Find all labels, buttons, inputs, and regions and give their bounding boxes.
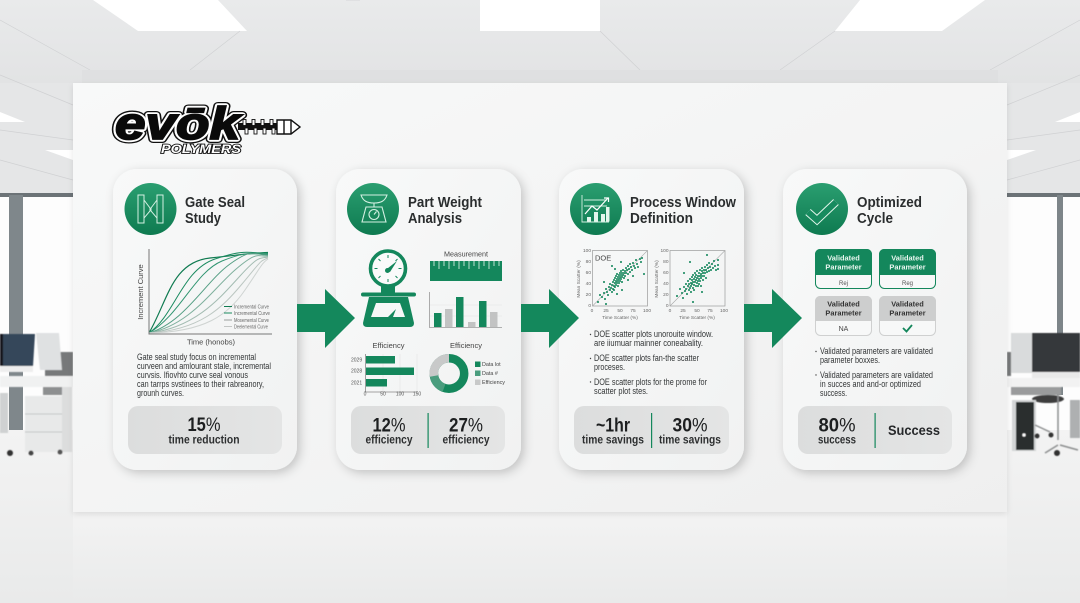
line chart: incremental curves: Incremental Curve — [234, 311, 270, 317]
parameter box: NA: NA — [839, 326, 849, 333]
bullet list: Validated parameters are validated — [820, 346, 933, 356]
scatter plot: DOE: 0 — [588, 303, 591, 309]
scatter plot: DOE: Mean Scatter (%) — [576, 260, 582, 298]
parameter box: Rej — [815, 249, 872, 288]
arrow: step 1 to 2 — [297, 289, 355, 348]
bullet list: are iiumuar mainner coneabality. — [594, 338, 703, 348]
logo: Evok Polymers: evōk — [115, 98, 242, 149]
text block — [137, 352, 271, 398]
line chart: incremental curves: Deelemental Curve — [234, 324, 268, 330]
bullet list: Validated parameters are validated — [820, 370, 933, 380]
scatter plot: DOE: 0 — [591, 308, 594, 314]
horizontal bar chart: Efficiency: 0 — [364, 392, 367, 398]
horizontal bar chart: Efficiency: 2021 — [351, 380, 362, 386]
panel: Optimized Cycle — [783, 169, 967, 470]
scatter plot: DOE — [576, 248, 651, 321]
scatter plot: DOE: Time Scatter (%) — [602, 315, 638, 321]
stat: 12% and 27% efficiency: 12% — [372, 414, 406, 436]
line chart: incremental curves: Increment Curve — [136, 264, 145, 320]
stat: ~1hr and 30% time savings: 30% — [672, 414, 708, 436]
stat: 12% and 27% efficiency: efficiency — [366, 434, 413, 446]
heading: Optimized — [857, 195, 922, 211]
line chart: incremental curves: Time (honobs) — [187, 338, 236, 346]
scatter plot: DOE: 75 — [630, 308, 636, 314]
donut chart: Efficiency: Data lot — [482, 362, 501, 368]
stat: 15% time reduction: 15% — [188, 414, 220, 436]
text block: curveen and amlourant stale, incremental — [137, 361, 271, 371]
stat: 80% success: success — [818, 434, 856, 446]
stat: 12% and 27% efficiency: 27% — [449, 414, 483, 436]
parameter box: check — [879, 296, 936, 336]
icon: check mark — [796, 183, 848, 235]
bullet list: success. — [820, 388, 847, 398]
icon: small scale — [347, 183, 399, 235]
horizontal bar chart: Efficiency: 50 — [380, 392, 386, 398]
parameter box: check: Validated — [891, 300, 924, 308]
horizontal bar chart: Efficiency: 2028 — [351, 368, 362, 374]
parameter box: NA: Validated — [827, 300, 860, 308]
parameter box: Reg: Reg — [902, 281, 913, 287]
panel: Process Window Definition — [559, 169, 744, 470]
scatter plot: DOE: 80 — [586, 259, 591, 265]
logo: Evok Polymers: evōk — [115, 98, 242, 149]
stat: 12% and 27% efficiency — [351, 406, 505, 454]
scatter plot: second: 75 — [707, 308, 713, 314]
line chart: incremental curves: Incremental Curve — [234, 304, 269, 310]
scatter plot: second: 100 — [660, 248, 669, 254]
scatter plot: second: 0 — [669, 308, 672, 314]
donut chart: Efficiency — [434, 341, 505, 389]
donut chart: Efficiency: Efficiency — [450, 341, 482, 350]
line chart: incremental curves: Mosemental Curve — [234, 318, 269, 324]
parameter box: NA: Parameter — [825, 308, 862, 318]
icon: rising chart — [570, 183, 622, 235]
stat: ~1hr and 30% time savings: time savings — [582, 434, 644, 446]
text block: can tarrps svstinees to their rabreanory, — [137, 379, 264, 389]
logo: Evok Polymers: POLYMERS — [161, 142, 241, 156]
stat: 80% success: 80% — [818, 414, 856, 436]
bullet list: DOE scatter plots unorouite window. — [594, 329, 713, 339]
horizontal bar chart: Efficiency: Efficiency — [373, 341, 405, 350]
bar chart — [430, 292, 502, 328]
stat: 80% success: Success — [888, 422, 940, 438]
scatter plot: DOE: 40 — [586, 281, 591, 287]
illustration: weighing scale — [361, 251, 416, 327]
scatter plot: second: 0 — [666, 303, 669, 309]
horizontal bar chart: Efficiency: 100 — [396, 392, 404, 398]
text block: curvsis. Ifiovhto curve seal vonous — [137, 370, 248, 380]
stat: 15% time reduction — [128, 406, 282, 454]
right office furniture — [1007, 333, 1080, 456]
stat: 12% and 27% efficiency: efficiency — [442, 434, 490, 446]
horizontal bar chart: Efficiency — [351, 341, 421, 398]
scatter plot: DOE: 100 — [583, 248, 591, 254]
donut chart: Efficiency: Efficiency — [482, 380, 505, 386]
logo: Evok Polymers — [115, 98, 300, 156]
heading: Study — [185, 211, 221, 227]
horizontal bar chart: Efficiency: 150 — [413, 392, 421, 398]
parameter box: Reg: Validated — [891, 254, 924, 262]
ruler: Measurement — [430, 250, 502, 281]
scatter plot: second: Mean Scatter (%) — [654, 260, 660, 298]
bullet list: in succes and and-or optimized — [820, 379, 921, 389]
panel: Gate Seal Study — [113, 169, 297, 470]
heading: Definition — [630, 211, 693, 227]
scatter plot: second: 50 — [694, 308, 700, 314]
left office furniture — [0, 333, 73, 456]
parameter box: check: Parameter — [889, 308, 926, 318]
heading: Part Weight — [408, 195, 482, 211]
scatter plot: DOE: DOE — [595, 254, 611, 262]
heading: Analysis — [408, 211, 462, 227]
stat: ~1hr and 30% time savings: ~1hr — [596, 414, 630, 436]
stat: ~1hr and 30% time savings: time savings — [659, 434, 721, 446]
heading — [408, 195, 482, 227]
text block: Gate seal study focus on incremental — [137, 352, 256, 362]
scatter plot: second: Time Scatter (%) — [679, 315, 715, 321]
parameter box: Reg: Parameter — [889, 262, 926, 272]
scatter plot: DOE: 50 — [617, 308, 623, 314]
scatter plot: DOE: 60 — [586, 270, 591, 276]
scatter plot: second: 25 — [680, 308, 686, 314]
stat: 80% success — [798, 406, 952, 454]
bullet list: DOE scatter plots fan-the scatter — [594, 353, 699, 363]
text block: grounh curves. — [137, 388, 184, 398]
bullet list — [815, 346, 933, 398]
stat: 15% time reduction: time reduction — [168, 434, 240, 446]
scatter plot: second — [654, 248, 728, 321]
heading: Process Window — [630, 195, 737, 211]
scatter plot: second: 100 — [720, 308, 728, 314]
scatter plot: second: 60 — [663, 270, 669, 276]
bullet list: parameter boxxes. — [820, 355, 880, 365]
heading: Cycle — [857, 211, 893, 227]
bullet list: proceses. — [594, 362, 625, 372]
heading — [857, 195, 922, 227]
icon: gate seal — [124, 183, 176, 235]
white wall panel — [73, 83, 1007, 512]
bullet list: scatter plot stes. — [594, 386, 648, 396]
scatter plot: DOE: 25 — [603, 308, 609, 314]
arrow: step 2 to 3 — [521, 289, 579, 348]
scatter plot: second: 40 — [663, 281, 669, 287]
parameter box: Rej: Parameter — [825, 262, 862, 272]
parameter box: Rej: Validated — [827, 254, 860, 262]
heading — [185, 195, 245, 227]
scatter plot: second: 80 — [663, 259, 669, 265]
stat: ~1hr and 30% time savings — [574, 406, 729, 454]
donut chart: Efficiency: Data # — [482, 371, 498, 377]
heading: Gate Seal — [185, 195, 245, 211]
logo: Evok Polymers: evōk — [115, 98, 242, 149]
ruler: Measurement: Measurement — [444, 250, 488, 258]
horizontal bar chart: Efficiency: 2029 — [351, 358, 362, 364]
scatter plot: second: 20 — [663, 292, 669, 298]
scatter plot: DOE: 100 — [643, 308, 651, 314]
bullet list: DOE scatter plots for the prome for — [594, 377, 707, 387]
parameter box: Rej: Rej — [839, 281, 848, 287]
bullet list — [590, 329, 713, 396]
line chart: incremental curves — [136, 249, 272, 346]
arrow: step 3 to 4 — [744, 289, 802, 348]
parameter box: NA — [815, 296, 872, 336]
parameter box: Reg — [879, 249, 936, 288]
panel: Part Weight Analysis — [336, 169, 521, 470]
heading — [630, 195, 737, 227]
scatter plot: DOE: 20 — [586, 292, 591, 298]
